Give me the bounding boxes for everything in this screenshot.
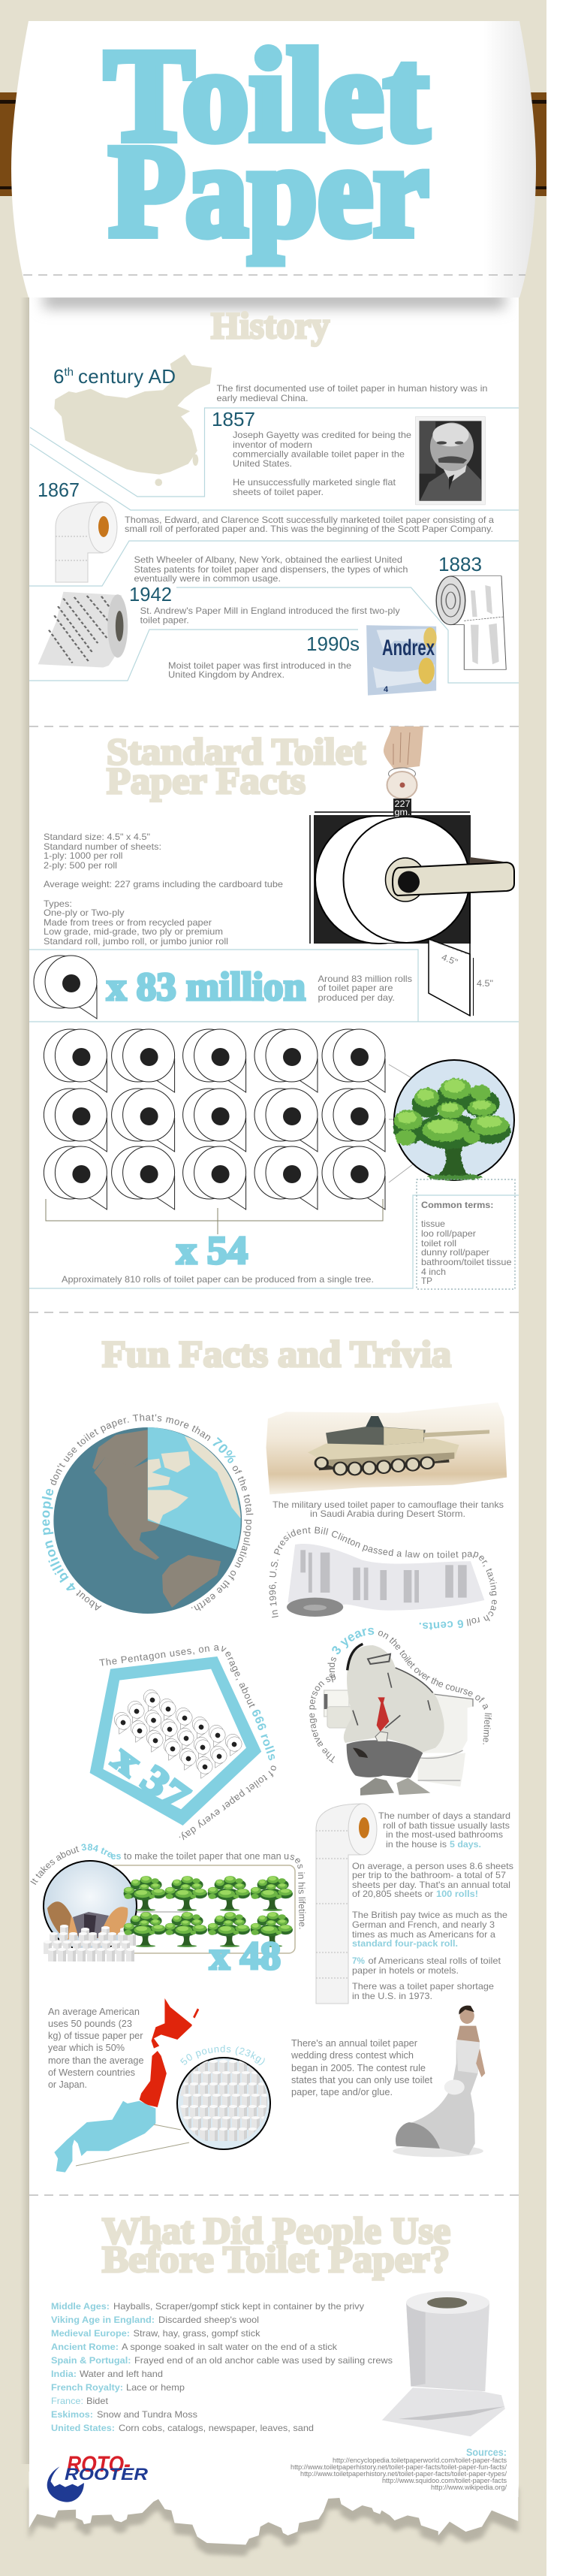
1857: He unsuccessfully marketed single flat — [233, 477, 396, 488]
6th century AD: th — [64, 366, 74, 379]
heading: history: History — [211, 304, 330, 346]
box: common terms: 4 inch — [421, 1267, 446, 1277]
text: of Western countries — [48, 2067, 135, 2078]
text: more than the average — [48, 2055, 144, 2066]
logo: Roto-Rooter — [47, 2452, 148, 2502]
Japan fact — [48, 1998, 271, 2173]
icon: Andrex pack: 4 — [384, 685, 389, 694]
list: before toilet paper: Straw, hay, grass, gompf stick — [134, 2328, 261, 2339]
sources: http://www.toiletpaperhistory.net/toilet-paper-facts/toilet-paper-fun-facts/ — [291, 2463, 507, 2472]
1990s — [168, 625, 437, 696]
fact: 100 rolls — [352, 1861, 513, 1899]
text — [48, 2006, 144, 2090]
list: before toilet paper: United States: — [51, 2423, 115, 2433]
box: common terms: toilet roll — [421, 1238, 456, 1249]
trees — [124, 1876, 293, 1947]
logo: Roto-Rooter: ROOTER — [65, 2465, 148, 2484]
curved text: It takes about 384 trees to make the toilet paper that one man uses in his lifetime. — [30, 1844, 306, 1929]
icon: Andrex pack — [366, 625, 437, 696]
box: common terms: tissue — [421, 1219, 445, 1229]
1857: 1857 — [212, 408, 255, 430]
heading: what did people use: What Did People Use — [102, 2209, 450, 2251]
rolls in pentagon — [109, 1687, 245, 1778]
list: before toilet paper: Hayballs, Scraper/gompf stick kept in container by the privy — [113, 2301, 364, 2312]
fact column with long roll — [316, 1804, 513, 2004]
list: before toilet paper: Lace or hemp — [126, 2382, 185, 2393]
list: before toilet paper: Medieval Europe: — [51, 2328, 130, 2339]
1942: 1942 — [129, 583, 172, 605]
1857: commercially available toilet paper in the — [233, 449, 405, 460]
fact: 5 days: in the house is — [386, 1839, 447, 1850]
heading: standard toilet paper facts — [107, 730, 366, 802]
list: before toilet paper: Viking Age in England: — [51, 2315, 155, 2325]
panel: rolls from a single tree — [29, 1029, 519, 1289]
fact: 7%: 7% — [352, 1955, 365, 1966]
icon: long toilet roll — [316, 1804, 377, 2004]
box: common terms: loo roll/paper — [421, 1228, 476, 1239]
title — [104, 23, 429, 264]
text: An average American — [48, 2006, 140, 2017]
title: Toilet — [104, 23, 429, 169]
list: before toilet paper: Frayed end of an old anchor cable was used by sailing crews — [134, 2355, 393, 2366]
1942: toilet paper. — [140, 615, 189, 625]
curved text: The Pentagon uses, on average, about 666 rolls of toilet paper every day. — [99, 1645, 276, 1841]
icon: roll — [34, 956, 97, 1019]
icon: circle of rolls — [177, 2058, 270, 2149]
sources: http://www.wikipedia.org/ — [431, 2484, 507, 2492]
paper sheet with dimensions — [429, 880, 493, 1016]
1857: United States. — [233, 458, 292, 469]
caption: Approximately 810 rolls of toilet paper can be produced from a single tree. — [62, 1274, 374, 1285]
toilet sitter fact — [309, 1627, 492, 1795]
1883: States patents for toilet paper and dispensers, the types of which — [134, 564, 408, 575]
fact: 5 days: The number of days a standard — [378, 1810, 510, 1821]
roll shadow — [44, 291, 505, 308]
1867 — [38, 479, 494, 582]
fact: 7%: paper in hotels or motels. — [352, 1965, 459, 1976]
text: standard facts: Standard roll, jumbo roll, or jumbo junior roll — [44, 936, 228, 947]
icon: hand holding weighing scale: 227 — [395, 800, 410, 809]
fact: 7%: of Americans steal rolls of toilet — [368, 1955, 501, 1966]
1990s: Moist toilet paper was first introduced in the — [168, 660, 351, 671]
wooden roll holder — [0, 92, 546, 196]
paper sheet with dimensions: 4.5" — [477, 978, 493, 989]
384 trees fact — [30, 1844, 306, 1978]
caption: Around 83 million rolls — [318, 974, 412, 984]
text: standard facts: Standard number of sheets: — [44, 841, 161, 852]
fact: 5 days: 5 days. — [450, 1839, 481, 1850]
1867: 1867 — [38, 479, 80, 501]
text: standard facts: Types: — [44, 898, 72, 909]
list: before toilet paper: A sponge soaked in salt water on the end of a stick — [122, 2342, 338, 2352]
icon: hand holding weighing scale: gm. — [395, 808, 410, 817]
list: before toilet paper: Ancient Rome: — [51, 2342, 119, 2352]
6th century AD — [53, 365, 488, 403]
1857: sheets of toilet paper. — [233, 487, 324, 497]
text: paper, tape and/or glue. — [291, 2086, 393, 2097]
text: kg) of tissue paper per — [48, 2030, 143, 2041]
fact: shortage: in the U.S. in 1973. — [352, 1991, 432, 2001]
sources: Sources: — [466, 2446, 507, 2458]
list: before toilet paper: France: — [51, 2396, 83, 2406]
text: standard facts: Average weight: 227 grams including the cardboard tube — [44, 879, 283, 889]
1942: St. Andrew's Paper Mill in England introduced the first two-ply — [140, 605, 400, 616]
sources — [291, 2446, 507, 2492]
1942 — [38, 583, 400, 667]
grid of rolls — [44, 1029, 385, 1209]
1990s: United Kingdom by Andrex. — [168, 669, 285, 680]
fact: British: German and French, and nearly 3 — [352, 1919, 495, 1930]
globe fact — [42, 1414, 254, 1614]
icon: hand holding weighing scale — [384, 726, 423, 817]
icon: map of China — [54, 355, 212, 486]
fact: 5 days: roll of bath tissue usually lasts — [383, 1820, 510, 1831]
toilet paper roll header — [11, 21, 536, 297]
photo: camouflaged tank — [266, 1403, 507, 1494]
text: standard facts: One-ply or Two-ply — [44, 907, 125, 918]
fact: 5 days — [378, 1810, 510, 1850]
curved text: The average person spends 3 years on the toilet over the course of a lifetime. — [309, 1627, 492, 1763]
big number: x 83 million — [107, 965, 306, 1009]
text: standard facts: 1-ply: 1000 per roll — [44, 850, 123, 861]
text: or Japan. — [48, 2079, 87, 2090]
icon: tree — [393, 1060, 514, 1180]
Clinton tax fact — [269, 1527, 497, 1630]
illustration: large roll on holder — [310, 726, 514, 1016]
icon: globe pie chart — [53, 1427, 242, 1614]
list: before toilet paper — [51, 2301, 393, 2433]
6th century AD: 6 — [53, 365, 64, 388]
heading: standard toilet paper facts: Paper Facts — [107, 760, 306, 802]
tank fact: in Saudi Arabia during Desert Storm. — [310, 1508, 465, 1519]
heading: what did people use: Before Toilet Paper? — [102, 2238, 450, 2280]
fact: 5 days: in the most-used bathrooms — [386, 1829, 503, 1840]
text: standard facts — [44, 832, 283, 947]
panel: history timeline — [29, 355, 519, 2502]
paper sheet — [29, 297, 519, 2556]
big number: x 54 — [176, 1229, 248, 1273]
icon: Andrex pack: Andrex — [382, 636, 435, 660]
icon: newspaper toilet roll — [287, 1544, 484, 1617]
text: year which is 50% — [48, 2042, 125, 2053]
icon: patent roll sketch — [436, 576, 506, 669]
caption: produced per day. — [318, 992, 395, 1003]
sources: http://www.squidoo.com/toilet-paper-facts — [382, 2477, 507, 2485]
wedding dress fact — [291, 2006, 485, 2157]
sources: http://www.toiletpaperhistory.net/toilet-paper-facts/toilet-paper-types/ — [300, 2470, 507, 2478]
icon: sheet music roll — [38, 592, 128, 667]
caption — [318, 974, 412, 1003]
list: before toilet paper: Discarded sheep's wool — [158, 2315, 259, 2325]
curved label: 50 pounds (23kg) — [180, 2045, 265, 2066]
icon: man on toilet — [324, 1644, 473, 1795]
6th century AD: The first documented use of toilet paper in human history was in — [216, 383, 488, 394]
fact: British: The British pay twice as much as the — [352, 1910, 507, 1920]
6th century AD: century AD — [78, 365, 176, 388]
text: standard facts: Low grade, mid-grade, two ply or premium — [44, 926, 223, 937]
1867: small roll of perforated paper and. This was the beginning of the Scott Paper Company. — [125, 524, 493, 534]
list: before toilet paper: India: — [51, 2369, 77, 2379]
fact: 100 rolls: 100 rolls! — [436, 1889, 478, 1899]
sources: http://encyclopedia.toiletpaperworld.com/toilet-paper-facts — [333, 2457, 507, 2465]
curved text: In 1996, U.S. President Bill Clinton passed a law on toilet paper, taxing each roll 6 cents. — [269, 1527, 497, 1630]
big number: x 48 — [209, 1934, 281, 1978]
icon: paper towel roll — [382, 2291, 505, 2436]
fact: shortage — [352, 1981, 494, 2001]
fact: 100 rolls: of 20,805 sheets or — [352, 1889, 433, 1899]
box: common terms: dunny roll/paper — [421, 1247, 489, 1258]
box: common terms — [417, 1179, 515, 1289]
icon: man buried in rolls — [44, 1861, 137, 1961]
icon: toilet roll — [56, 502, 117, 582]
fact: 100 rolls: per trip to the bathroom- a total of 57 — [352, 1870, 506, 1880]
big number: x 37 — [104, 1736, 197, 1820]
portrait: Joseph Gayetty — [416, 416, 485, 505]
text — [291, 2037, 432, 2097]
text: standard facts: Made from trees or from recycled paper — [44, 917, 212, 928]
1857: Joseph Gayetty was credited for being the — [233, 430, 411, 440]
text: There's an annual toilet paper — [291, 2037, 418, 2049]
box: common terms: bathroom/toilet tissue — [421, 1257, 512, 1267]
heading: what did people use — [102, 2209, 450, 2280]
curved text: About 4 billion people don't use toilet paper. That's more than 70% of the total population of the earth. — [42, 1414, 254, 1611]
text: uses 50 pounds (23 — [48, 2018, 132, 2029]
list: before toilet paper: Middle Ages: — [51, 2301, 110, 2312]
box: common terms: Common terms: — [421, 1200, 494, 1210]
fact: shortage: There was a toilet paper shortage — [352, 1981, 494, 1992]
1883: Seth Wheeler of Albany, New York, obtained the earliest United — [134, 554, 402, 565]
fact: 100 rolls: On average, a person uses 8.6 sheets — [352, 1861, 513, 1871]
text: states that you can only use toilet — [291, 2074, 432, 2085]
list: before toilet paper: Corn cobs, catalogs, newspaper, leaves, sand — [119, 2423, 314, 2433]
text: standard facts: Standard size: 4.5" x 4.5" — [44, 832, 150, 842]
list: before toilet paper: Spain & Portugal: — [51, 2355, 131, 2366]
6th century AD: early medieval China. — [216, 393, 308, 403]
panel: 83 million rolls per day — [29, 950, 519, 1022]
tank fact: The military used toilet paper to camouflage their tanks — [272, 1499, 504, 1510]
1857 — [212, 408, 411, 497]
1990s: 1990s — [306, 633, 360, 655]
fact: British: times as much as Americans for a — [352, 1929, 495, 1940]
1883 — [134, 553, 506, 669]
1867: Thomas, Edward, and Clarence Scott successfully marketed toilet paper consisting of a — [125, 515, 494, 525]
title: Paper — [109, 118, 429, 264]
logo: Roto-Rooter: ROTO- — [67, 2452, 131, 2477]
list: before toilet paper: French Royalty: — [51, 2382, 123, 2393]
caption: of toilet paper are — [318, 983, 393, 993]
Pentagon fact — [90, 1645, 276, 1841]
icon: bride — [393, 2006, 485, 2157]
box: common terms: TP — [421, 1276, 432, 1286]
heading: standard toilet paper facts: Standard Toilet — [107, 730, 366, 772]
text: wedding dress contest which — [291, 2049, 414, 2061]
text: began in 2005. The contest rule — [291, 2062, 426, 2073]
text: standard facts: 2-ply: 500 per roll — [44, 860, 117, 871]
list: before toilet paper: Snow and Tundra Moss — [97, 2409, 197, 2420]
fact: British: standard four-pack roll. — [352, 1938, 458, 1949]
icon: map of Japan — [54, 1998, 199, 2173]
list: before toilet paper: Water and left hand — [80, 2369, 163, 2379]
list: before toilet paper: Bidet — [86, 2396, 109, 2406]
paper sheet with dimensions: 4.5" — [440, 952, 459, 968]
list: before toilet paper: Eskimos: — [51, 2409, 93, 2420]
1883: 1883 — [438, 553, 482, 575]
heading: fun facts and trivia: Fun Facts and Trivia — [102, 1333, 451, 1375]
fact: 7% — [352, 1955, 501, 1976]
fact: 100 rolls: sheets per day. That's an annual total — [352, 1880, 510, 1890]
tank fact — [266, 1403, 507, 1519]
icon: pentagon outline — [90, 1656, 261, 1826]
fact: British — [352, 1910, 507, 1949]
1857: inventor of modern — [233, 439, 312, 450]
1883: eventually were in common usage. — [134, 573, 281, 584]
